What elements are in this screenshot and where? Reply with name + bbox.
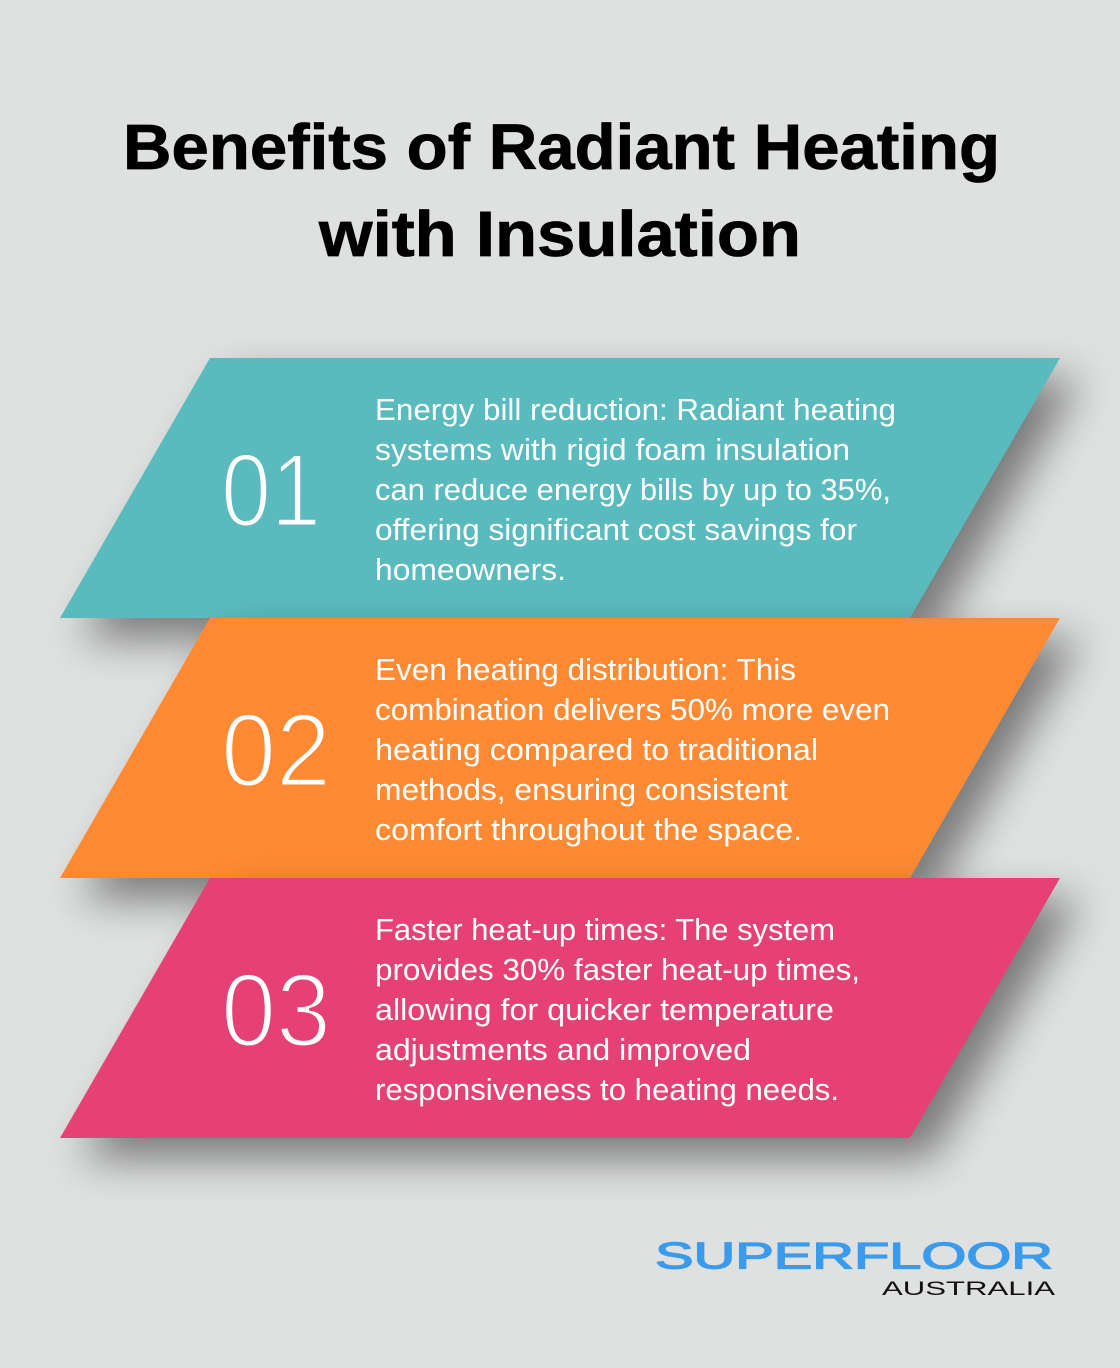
text: energy bill reduction: offering significant cost savings for xyxy=(375,513,857,547)
text: energy bill reduction: can reduce energy bills by up to 35%, xyxy=(375,473,891,507)
text: faster heat-up times xyxy=(375,913,860,1107)
orange parallelogram band xyxy=(60,618,1060,878)
text: even heating distribution xyxy=(375,653,890,847)
text: faster heat-up times: allowing for quicker temperature xyxy=(375,993,834,1027)
logo: Superfloor Australia: AUSTRALIA xyxy=(882,1278,1055,1300)
panel: step 02 even heating distribution xyxy=(60,618,1080,899)
number 02: 02 xyxy=(221,693,331,809)
panel: step 01 energy bill reduction xyxy=(60,358,1080,639)
pink parallelogram band xyxy=(60,878,1060,1138)
text: faster heat-up times: provides 30% faster heat-up times, xyxy=(375,953,860,987)
text: even heating distribution: comfort throughout the space. xyxy=(375,813,802,847)
number 03: 03 xyxy=(221,953,331,1069)
title xyxy=(123,111,1000,270)
text: energy bill reduction: homeowners. xyxy=(375,553,566,587)
text: faster heat-up times: responsiveness to heating needs. xyxy=(375,1073,839,1107)
text: energy bill reduction xyxy=(375,393,896,587)
title: Benefits of Radiant Heating xyxy=(123,111,1000,183)
text: even heating distribution: methods, ensuring consistent xyxy=(375,773,789,807)
text: faster heat-up times: adjustments and improved xyxy=(375,1033,751,1067)
text: energy bill reduction: Energy bill reduction: Radiant heating xyxy=(375,393,896,427)
teal parallelogram band xyxy=(60,358,1060,618)
logo: Superfloor Australia xyxy=(655,1234,1055,1300)
logo: Superfloor Australia: SUPERFLOOR xyxy=(655,1234,1053,1276)
text: even heating distribution: Even heating distribution: This xyxy=(375,653,796,687)
number 01: 01 xyxy=(221,433,321,549)
text: even heating distribution: heating compared to traditional xyxy=(375,733,818,767)
text: energy bill reduction: systems with rigid foam insulation xyxy=(375,433,850,467)
panel: step 03 faster heat-up times xyxy=(60,878,1080,1159)
text: faster heat-up times: Faster heat-up times: The system xyxy=(375,913,835,947)
title: with Insulation xyxy=(318,198,801,270)
text: even heating distribution: combination delivers 50% more even xyxy=(375,693,890,727)
